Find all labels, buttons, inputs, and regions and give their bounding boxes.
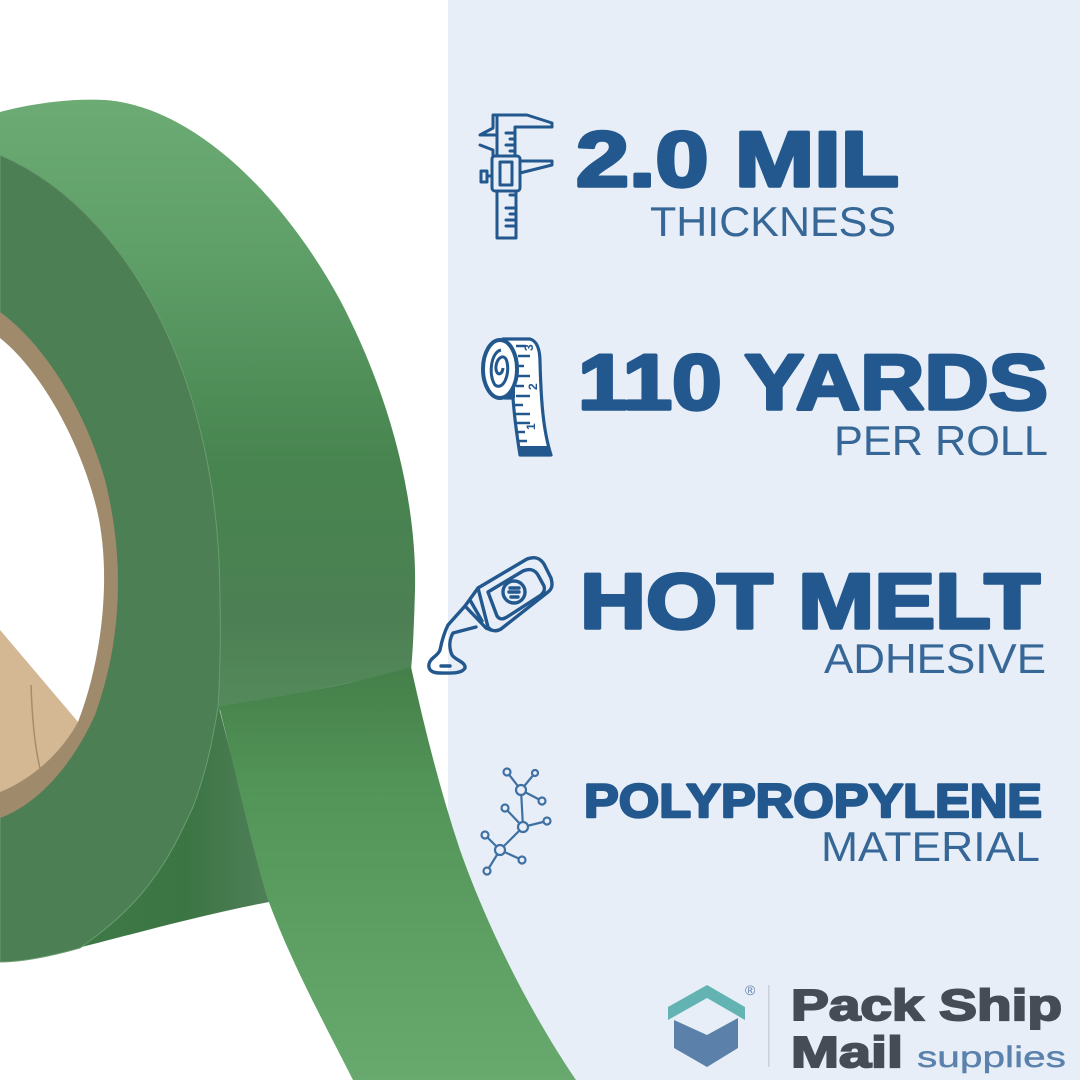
tape: dark side face: [0, 155, 220, 962]
logo divider: [768, 985, 770, 1067]
logo wordmark line 2: Mail: [791, 1028, 903, 1077]
feature: length: [483, 338, 1048, 464]
logo wordmark supplies: supplies: [917, 1041, 1066, 1074]
tape: loose tail: [219, 667, 576, 1080]
heading: hot melt: HOT MELT: [580, 557, 1040, 645]
heading: polypropylene: POLYPROPYLENE: [584, 774, 1042, 827]
logo mark: roof: [668, 985, 745, 1020]
tape roll photo: [0, 100, 576, 1080]
icon: tape measure: 1: [524, 423, 538, 430]
tape: outer top surface: [0, 100, 415, 710]
tape measure numbers: 3: [522, 344, 536, 351]
registered mark: ®: [745, 982, 756, 998]
heading: 2.0 MIL: 2.0 MIL: [576, 115, 899, 203]
feature: thickness: [480, 115, 899, 245]
icon: molecule: [482, 768, 550, 874]
feature: material: [482, 768, 1042, 874]
icon: tape measure: [483, 339, 551, 456]
label: adhesive: ADHESIVE: [824, 635, 1046, 682]
cardboard core inside: [0, 630, 78, 792]
heading: 110 yards: 110 YARDS: [578, 338, 1048, 426]
feature: adhesive: [429, 557, 1046, 682]
logo mark: box: [674, 1018, 738, 1067]
cardboard core edge: [0, 312, 118, 818]
logo: Pack Ship Mail supplies: [668, 981, 1066, 1077]
logo wordmark line 1: Pack Ship: [791, 981, 1062, 1030]
background panel: [448, 0, 1080, 1080]
core seam: [31, 685, 41, 772]
center hole: [0, 338, 104, 722]
icon: caliper: [480, 115, 552, 238]
tape: shaded wedge under roll: [60, 704, 269, 950]
label: material: MATERIAL: [821, 823, 1040, 870]
icon: glue bottle: [429, 558, 552, 673]
label: per roll: PER ROLL: [834, 417, 1048, 464]
label: thickness: THICKNESS: [650, 198, 896, 245]
icon: tape measure: 2: [526, 383, 540, 390]
